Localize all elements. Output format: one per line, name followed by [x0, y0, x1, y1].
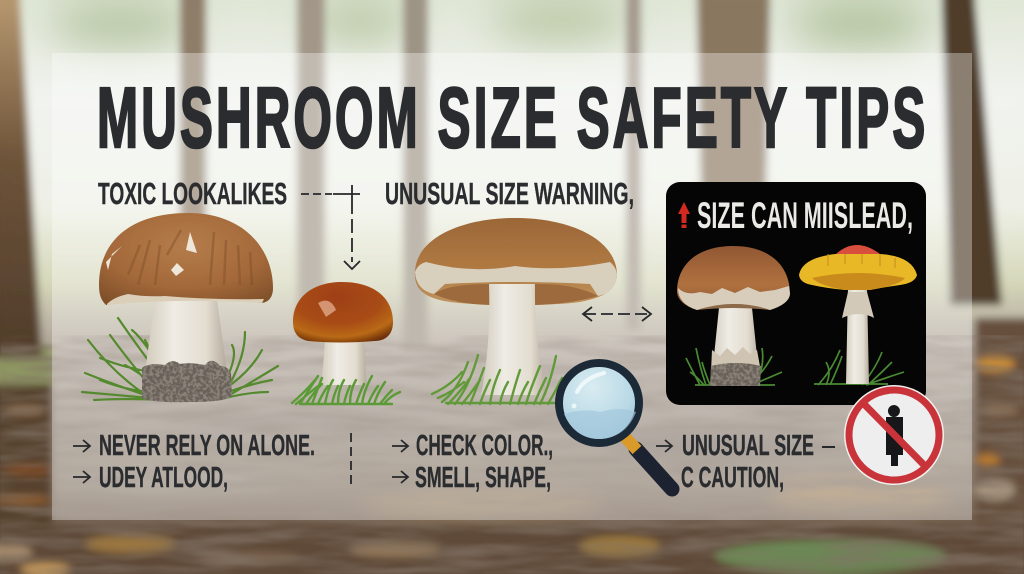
grass tuft	[432, 355, 562, 404]
slash	[863, 403, 926, 467]
grass tufts	[82, 318, 278, 400]
text: udey atlood: UDEY ATLOOD,	[99, 462, 228, 494]
arrow bullet 1	[73, 440, 90, 452]
arrow bullet 5	[656, 440, 672, 452]
cap	[99, 213, 273, 305]
dashed divider	[350, 433, 352, 487]
icon: red up arrow	[678, 202, 690, 228]
text: caution: C CAUTION,	[681, 462, 784, 494]
heading: unusual size warning: UNUSUAL SIZE WARNING,	[385, 176, 634, 211]
arrow: dashed down to small mushroom	[301, 185, 360, 269]
arrow bullet 3	[392, 440, 408, 452]
icon: magnifying glass	[559, 363, 672, 489]
panel: size can mislead	[666, 182, 926, 405]
icon: prohibition sign	[844, 385, 944, 485]
arrow bullet 2	[73, 471, 90, 483]
text: smell shape: SMELL, SHAPE,	[415, 462, 551, 494]
heading: toxic lookalikes: TOXIC LOOKALIKES	[98, 176, 287, 211]
figure	[886, 405, 903, 466]
mushroom: large tan with rim	[415, 218, 617, 404]
grass tuft	[292, 376, 400, 404]
soil	[142, 361, 232, 402]
arrow: double-headed dashed	[583, 307, 651, 321]
ground texture	[0, 335, 1024, 574]
text: never rely: NEVER RELY ON ALONE.	[99, 430, 315, 462]
dash	[822, 446, 835, 448]
text: unusual size: UNUSUAL SIZE	[682, 430, 814, 462]
text: check color: CHECK COLOR.,	[416, 430, 553, 462]
translucent main panel	[52, 53, 972, 520]
arrow bullet 4	[392, 471, 408, 483]
title: MUSHROOM SIZE SAFETY TIPS	[97, 70, 925, 165]
bullets: right column	[656, 430, 835, 494]
bullets: middle column	[392, 430, 553, 494]
mushroom: small orange-brown	[292, 282, 400, 404]
mushroom: yellow toxic	[799, 245, 917, 385]
bullets: left column	[73, 430, 315, 494]
mushroom: large brown with soil	[82, 213, 278, 402]
mushroom: brown on black	[677, 246, 790, 386]
